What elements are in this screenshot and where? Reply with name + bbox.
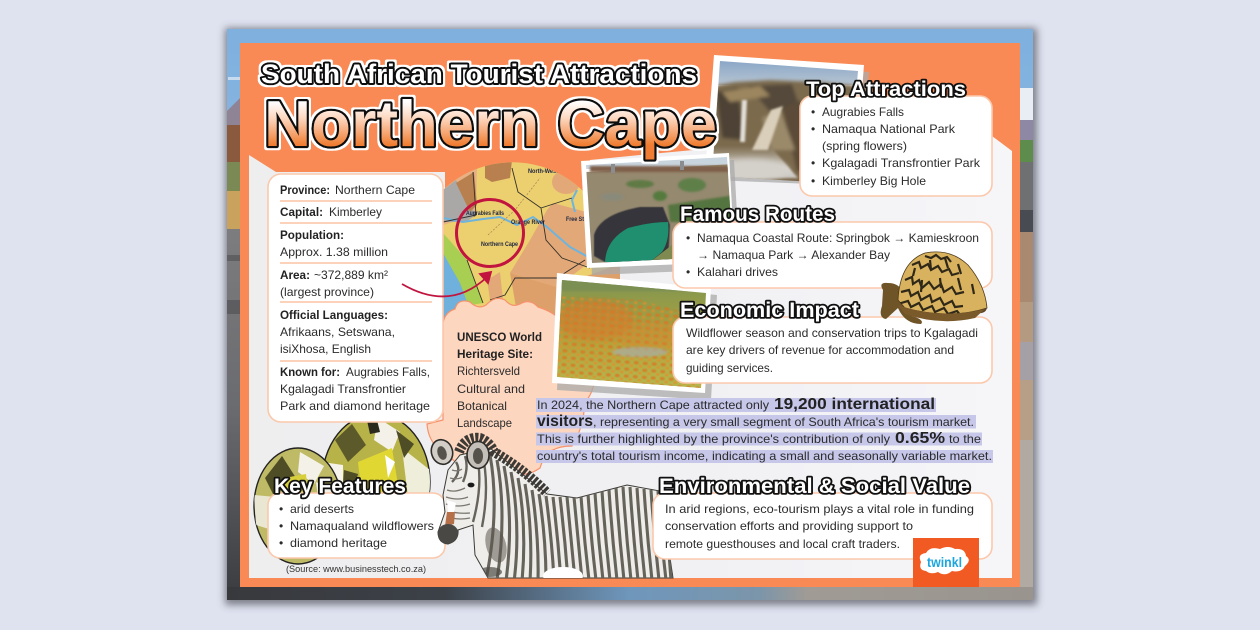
speech bubble: UNESCO background xyxy=(427,298,595,474)
panel: key features: • xyxy=(279,502,283,516)
panel: province facts: Park and diamond heritage xyxy=(280,399,430,413)
poster shadow xyxy=(225,28,1037,605)
text block: UNESCO World Heritage Site: Richtersveld xyxy=(457,364,520,378)
panel: province facts: Afrikaans, Setswana, xyxy=(280,325,395,339)
map of South Africa: Northern Cape xyxy=(481,241,518,248)
panel: environmental and social value: remote guesthouses and local craft traders. xyxy=(665,537,900,551)
panel: top attractions: • xyxy=(811,156,815,170)
text block: UNESCO World Heritage Site: UNESCO World xyxy=(457,330,542,344)
heading: economic impact: Economic Impact xyxy=(680,299,859,322)
callout: visitor statistics: This is further highlighted by the province's contribution of only xyxy=(537,432,890,446)
panel: province facts: Population: xyxy=(280,228,344,242)
icon: zebra xyxy=(428,437,673,585)
photo: Augrabies Falls xyxy=(705,55,869,190)
panel: province facts: Approx. 1.38 million xyxy=(280,245,388,259)
panel: province facts: Northern Cape xyxy=(335,183,415,197)
map of South Africa: North-West xyxy=(528,168,559,175)
orange frame xyxy=(240,43,1020,587)
panel: key features: • xyxy=(279,536,283,550)
panel: province facts: Area: xyxy=(280,268,310,282)
twinkl logo: twinkl xyxy=(927,554,962,570)
panel: environmental and social value: In arid regions, eco-tourism plays a vital role in funding xyxy=(665,502,974,516)
panel: key features xyxy=(268,475,445,558)
panel: famous routes: → Namaqua Park → Alexander Bay xyxy=(697,248,890,262)
title: Northern Cape: Northern Cape xyxy=(264,87,717,160)
panel: famous routes: Famous Routes xyxy=(680,203,835,226)
panel: famous routes: Kalahari drives xyxy=(697,265,778,279)
panel: top attractions: Kimberley Big Hole xyxy=(822,174,926,188)
panel: environmental and social value: conservation efforts and providing support to xyxy=(665,519,913,533)
panel: economic impact: guiding services. xyxy=(686,361,773,375)
panel: province facts: ~372,889 km² xyxy=(314,268,388,282)
panel: key features: arid deserts xyxy=(290,502,354,516)
callout: visitor statistics: In 2024, the Northern Cape attracted only xyxy=(537,398,769,412)
panel: key features: diamond heritage xyxy=(290,536,387,550)
panel: top attractions: (spring flowers) xyxy=(822,139,907,153)
photo: Kimberley Big Hole xyxy=(580,153,740,275)
panel: environmental and social value: Environmental & Social Value xyxy=(659,475,970,498)
map of South Africa: Free St xyxy=(566,216,585,223)
panel: economic impact: Wildflower season and conservation trips to Kgalagadi xyxy=(686,326,978,340)
panel: province facts: Known for: xyxy=(280,365,340,379)
panel: key features: • xyxy=(279,519,283,533)
callout: visitor statistics: country's total tourism income, indicating a small and seasonally variable market. xyxy=(537,449,992,463)
panel: top attractions: • xyxy=(811,105,815,119)
panel: top attractions: Augrabies Falls xyxy=(822,105,904,119)
panel: province facts: isiXhosa, English xyxy=(280,342,371,356)
panel: key features: Namaqualand wildflowers xyxy=(290,519,434,533)
panel: province facts: (largest province) xyxy=(280,285,374,299)
background photograph xyxy=(227,29,1033,600)
photo: Namaqualand wildflowers xyxy=(552,273,717,400)
panel: province facts: Kimberley xyxy=(329,205,382,219)
map of South Africa: Orange River xyxy=(511,219,545,226)
callout: visitor statistics xyxy=(536,396,993,463)
panel: economic impact xyxy=(673,317,992,383)
panel: key features: Key Features xyxy=(274,475,406,498)
callout: visitor statistics: to the xyxy=(949,432,981,446)
map of South Africa: Augrabies Falls xyxy=(466,210,504,217)
panel: top attractions xyxy=(800,78,992,196)
panel: famous routes xyxy=(673,203,992,288)
panel: province facts: Augrabies Falls, xyxy=(346,365,430,379)
red locator circle xyxy=(456,200,524,266)
panel: province facts: Province: xyxy=(280,183,330,197)
panel: province facts: Capital: xyxy=(280,205,323,219)
arrow: area to map xyxy=(402,272,491,296)
panel: top attractions: • xyxy=(811,174,815,188)
panel: environmental and social value xyxy=(653,475,992,559)
panel: top attractions: Namaqua National Park xyxy=(822,122,956,136)
text block: UNESCO World Heritage Site: Heritage Site: xyxy=(457,347,533,361)
text block: UNESCO World Heritage Site: Cultural and xyxy=(457,382,525,396)
callout: visitor statistics: visitors xyxy=(537,413,593,430)
icon: tortoise xyxy=(881,252,987,324)
panel: province facts xyxy=(268,174,443,422)
panel: top attractions: • xyxy=(811,122,815,136)
panel: famous routes: • xyxy=(686,265,690,279)
title: South African Tourist Attractions: South African Tourist Attractions xyxy=(261,59,697,89)
text block: UNESCO World Heritage Site xyxy=(457,330,542,430)
panel: top attractions: Top Attractions xyxy=(806,78,966,101)
panel: famous routes: • xyxy=(686,231,690,245)
callout: visitor statistics: , representing a very small segment of South Africa's tourism market. xyxy=(593,415,974,429)
text block: UNESCO World Heritage Site: Landscape xyxy=(457,416,512,430)
twinkl logo xyxy=(913,538,979,587)
panel: province facts: Official Languages: xyxy=(280,308,388,322)
source note: (Source: www.businesstech.co.za) xyxy=(286,564,426,575)
callout: visitor statistics: 0.65% xyxy=(895,430,945,447)
inner pale panel xyxy=(249,130,1012,578)
panel: famous routes: Namaqua Coastal Route: Springbok → Kamieskroon xyxy=(697,231,979,245)
map of South Africa xyxy=(444,162,620,318)
panel: province facts: Kgalagadi Transfrontier xyxy=(280,382,406,396)
callout: visitor statistics: 19,200 international xyxy=(774,396,935,413)
icon: diamonds xyxy=(254,414,430,564)
panel: economic impact: are key drivers of revenue for accommodation and xyxy=(686,343,954,357)
text block: UNESCO World Heritage Site: Botanical xyxy=(457,399,507,413)
panel: top attractions: Kgalagadi Transfrontier Park xyxy=(822,156,981,170)
